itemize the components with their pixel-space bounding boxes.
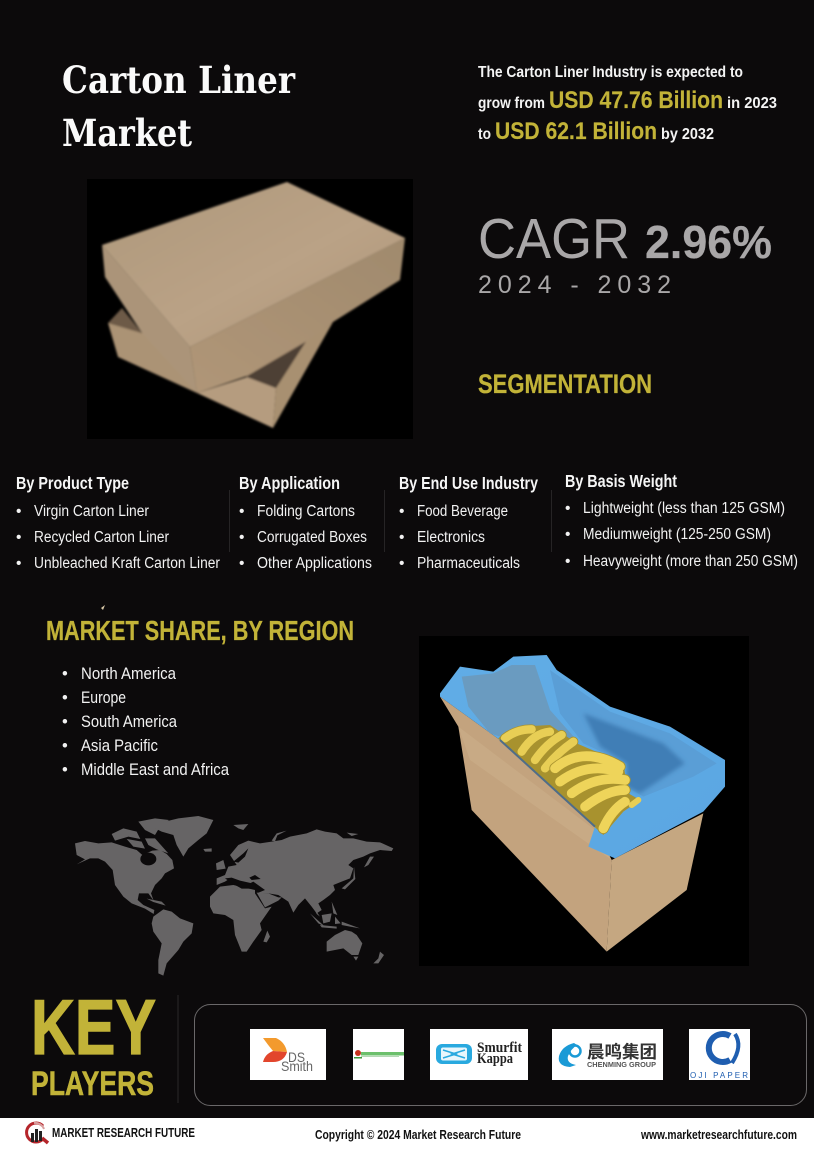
segment: by product type: Virgin Carton Liner bbox=[34, 503, 149, 520]
logo: Oji Paper: OJI PAPER bbox=[690, 1071, 748, 1080]
title bbox=[62, 58, 295, 155]
footer: Copyright © 2024 Market Research Future bbox=[315, 1127, 521, 1142]
region list: South America bbox=[81, 713, 178, 731]
segment: by end use industry bbox=[399, 473, 538, 572]
segment: by application: Corrugated Boxes bbox=[257, 529, 367, 546]
segment: by end use industry: Food Beverage bbox=[417, 503, 508, 520]
segment: by product type: Recycled Carton Liner bbox=[34, 529, 169, 546]
segment: by basis weight: • bbox=[565, 500, 570, 517]
segment: by end use industry: • bbox=[399, 529, 404, 546]
title: Carton Liner bbox=[62, 58, 295, 102]
segment: by product type: Unbleached Kraft Carton Liner bbox=[34, 555, 220, 572]
region list: • bbox=[62, 665, 68, 683]
segment: by basis weight: By Basis Weight bbox=[565, 471, 677, 491]
region list: Asia Pacific bbox=[81, 737, 158, 755]
logo: Chenming Group: 晨鸣集团 bbox=[587, 1042, 657, 1062]
segment: by end use industry: Pharmaceuticals bbox=[417, 555, 520, 572]
segment: by end use industry: Electronics bbox=[417, 529, 485, 546]
title: Market bbox=[62, 111, 192, 155]
market share heading: MARKET SHARE, BY REGION bbox=[46, 615, 354, 646]
CAGR figure bbox=[478, 207, 772, 299]
segment: by product type: • bbox=[16, 555, 21, 572]
logo: Smurfit Kappa bbox=[430, 1029, 528, 1080]
segment: by application: • bbox=[239, 555, 244, 572]
logo: Smurfit Kappa: Kappa bbox=[477, 1051, 514, 1067]
forecast statement: grow from bbox=[478, 95, 545, 112]
segment: by application: • bbox=[239, 529, 244, 546]
logo: Chenming Group: CHENMING GROUP bbox=[587, 1060, 656, 1069]
photo: stacked cardboard box bbox=[87, 179, 413, 439]
footer bbox=[0, 1118, 814, 1150]
region list: • bbox=[62, 761, 68, 779]
logo: DS Smith: Smith bbox=[281, 1059, 313, 1074]
segment: by basis weight bbox=[565, 471, 798, 570]
photo: bananas in lined carton bbox=[419, 636, 749, 966]
segment: by end use industry: • bbox=[399, 503, 404, 520]
CAGR figure: CAGR bbox=[478, 207, 630, 271]
region list: Europe bbox=[81, 689, 126, 707]
key players heading bbox=[31, 983, 156, 1103]
CAGR figure: 2.96% bbox=[645, 216, 772, 268]
segment: by application: By Application bbox=[239, 473, 340, 493]
footer: MARKET RESEARCH FUTURE bbox=[52, 1125, 195, 1140]
region list: Middle East and Africa bbox=[81, 761, 230, 779]
segment: by product type bbox=[16, 473, 220, 572]
segment: by product type: • bbox=[16, 503, 21, 520]
segment: by application: • bbox=[239, 503, 244, 520]
segment: by basis weight: Mediumweight (125-250 GSM) bbox=[583, 526, 771, 543]
segment: by product type: By Product Type bbox=[16, 473, 129, 493]
logo: DS Smith: DS bbox=[288, 1050, 305, 1065]
logo: Oji Paper bbox=[689, 1029, 750, 1080]
segment: by basis weight: • bbox=[565, 553, 570, 570]
segment: by basis weight: Lightweight (less than 125 GSM) bbox=[583, 500, 785, 517]
logo: DS Smith bbox=[250, 1029, 326, 1080]
forecast statement: by 2032 bbox=[661, 126, 714, 143]
forecast statement bbox=[478, 64, 777, 145]
region list bbox=[62, 665, 230, 779]
region list: • bbox=[62, 689, 68, 707]
forecast statement: in 2023 bbox=[727, 95, 777, 112]
panel: key player logos bbox=[194, 1004, 806, 1106]
forecast statement: USD 47.76 Billion bbox=[549, 87, 723, 114]
region list: North America bbox=[81, 665, 177, 683]
region list: • bbox=[62, 713, 68, 731]
region list: • bbox=[62, 737, 68, 755]
segmentation heading: SEGMENTATION bbox=[478, 369, 652, 399]
icon: market research future logo bbox=[27, 1123, 48, 1143]
forecast statement: USD 62.1 Billion bbox=[495, 118, 657, 145]
segment: by application: Folding Cartons bbox=[257, 503, 355, 520]
key players heading: KEY bbox=[31, 983, 156, 1071]
segment: by application bbox=[239, 473, 372, 572]
segment: by end use industry: By End Use Industry bbox=[399, 473, 538, 493]
forecast statement: The Carton Liner Industry is expected to bbox=[478, 64, 743, 81]
segment: by basis weight: • bbox=[565, 526, 570, 543]
logo: Smurfit Kappa: Smurfit bbox=[477, 1040, 522, 1056]
world map bbox=[75, 816, 393, 976]
key players heading: PLAYERS bbox=[31, 1065, 154, 1103]
forecast statement: to bbox=[478, 126, 491, 143]
logo: Chenming Group bbox=[552, 1029, 663, 1080]
CAGR figure: 2024 - 2032 bbox=[478, 271, 671, 299]
segment: by product type: • bbox=[16, 529, 21, 546]
segment: by end use industry: • bbox=[399, 555, 404, 572]
logo: Chinese paper group bbox=[353, 1029, 404, 1080]
segment: by application: Other Applications bbox=[257, 555, 372, 572]
